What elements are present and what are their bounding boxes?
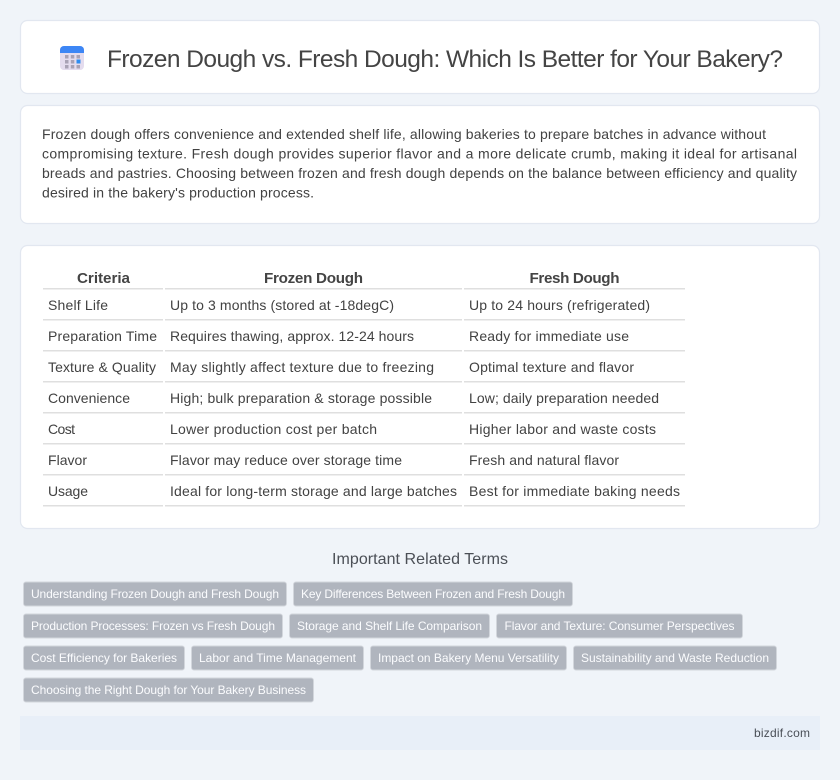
row: preparation time: Requires thawing, approx. 12-24 hours [170, 328, 414, 344]
intro text: breads and pastries. Choosing between frozen and fresh dough depends on the balance between efficiency and quality [42, 165, 797, 181]
panel: intro paragraph [20, 106, 820, 224]
table header: Criteria [77, 270, 131, 287]
tag: Impact on Bakery Menu Versatility [378, 651, 559, 665]
row: flavor: Fresh and natural flavor [469, 452, 619, 468]
tag [370, 646, 566, 670]
tag: Labor and Time Management [199, 651, 357, 665]
row: flavor [48, 452, 619, 468]
row: usage: Usage [48, 483, 88, 499]
footer bar [20, 716, 820, 750]
footer text: bizdif.com [754, 726, 810, 740]
tag: Sustainability and Waste Reduction [581, 651, 769, 665]
tag: Cost Efficiency for Bakeries [31, 651, 177, 665]
row: usage [48, 483, 680, 499]
related term tags [24, 582, 776, 702]
table header: Frozen Dough [264, 270, 363, 287]
tag: Flavor and Texture: Consumer Perspectives [504, 619, 734, 633]
row: convenience: Low; daily preparation needed [469, 390, 659, 406]
row: texture and quality [48, 359, 634, 375]
row: convenience: Convenience [48, 390, 130, 406]
row: cost: Higher labor and waste costs [469, 421, 656, 437]
tag [24, 614, 282, 638]
title: Frozen Dough vs. Fresh Dough: Which Is Better for Your Bakery? [107, 46, 783, 73]
panel: comparison table [20, 246, 820, 528]
icon: calendar [60, 46, 84, 70]
tag [192, 646, 364, 670]
row: preparation time: Ready for immediate use [469, 328, 629, 344]
header panel [20, 20, 820, 94]
tag [24, 582, 286, 606]
row: texture and quality: May slightly affect texture due to freezing [170, 359, 434, 375]
row: texture and quality: Optimal texture and flavor [469, 359, 634, 375]
row: usage: Best for immediate baking needs [469, 483, 680, 499]
tag [294, 582, 572, 606]
row: shelf life: Shelf Life [48, 297, 108, 313]
intro text: Frozen dough offers convenience and extended shelf life, allowing bakeries to prepare batches in advance without [42, 126, 766, 142]
row: cost [48, 421, 656, 437]
intro text: desired in the bakery's production process. [42, 184, 314, 200]
row: flavor: Flavor may reduce over storage time [170, 452, 402, 468]
row: preparation time: Preparation Time [48, 328, 157, 344]
row: usage: Ideal for long-term storage and large batches [170, 483, 457, 499]
tag: Key Differences Between Frozen and Fresh Dough [301, 587, 565, 601]
tag [574, 646, 776, 670]
tag [24, 646, 184, 670]
table header: Fresh Dough [530, 270, 620, 287]
row: shelf life [48, 297, 650, 313]
tag [496, 614, 742, 638]
row: cost: Lower production cost per batch [170, 421, 377, 437]
row: flavor: Flavor [48, 452, 87, 468]
table header [77, 270, 620, 287]
row: shelf life: Up to 24 hours (refrigerated) [469, 297, 650, 313]
tag: Choosing the Right Dough for Your Bakery Business [31, 683, 306, 697]
tag: Storage and Shelf Life Comparison [297, 619, 482, 633]
row: convenience [48, 390, 659, 406]
row: shelf life: Up to 3 months (stored at -18degC) [170, 297, 394, 313]
intro text: compromising texture. Fresh dough provides superior flavor and a more delicate crumb, making it ideal for artisanal [42, 146, 797, 162]
intro text [42, 126, 797, 200]
row: preparation time [48, 328, 629, 344]
row: convenience: High; bulk preparation & storage possible [170, 390, 432, 406]
heading: important related terms: Important Related Terms [332, 551, 508, 568]
tag [290, 614, 490, 638]
tag: Production Processes: Frozen vs Fresh Dough [31, 619, 275, 633]
row: cost: Cost [48, 421, 75, 437]
tag: Understanding Frozen Dough and Fresh Dough [31, 587, 279, 601]
row: texture and quality: Texture & Quality [48, 359, 156, 375]
tag [24, 678, 314, 702]
